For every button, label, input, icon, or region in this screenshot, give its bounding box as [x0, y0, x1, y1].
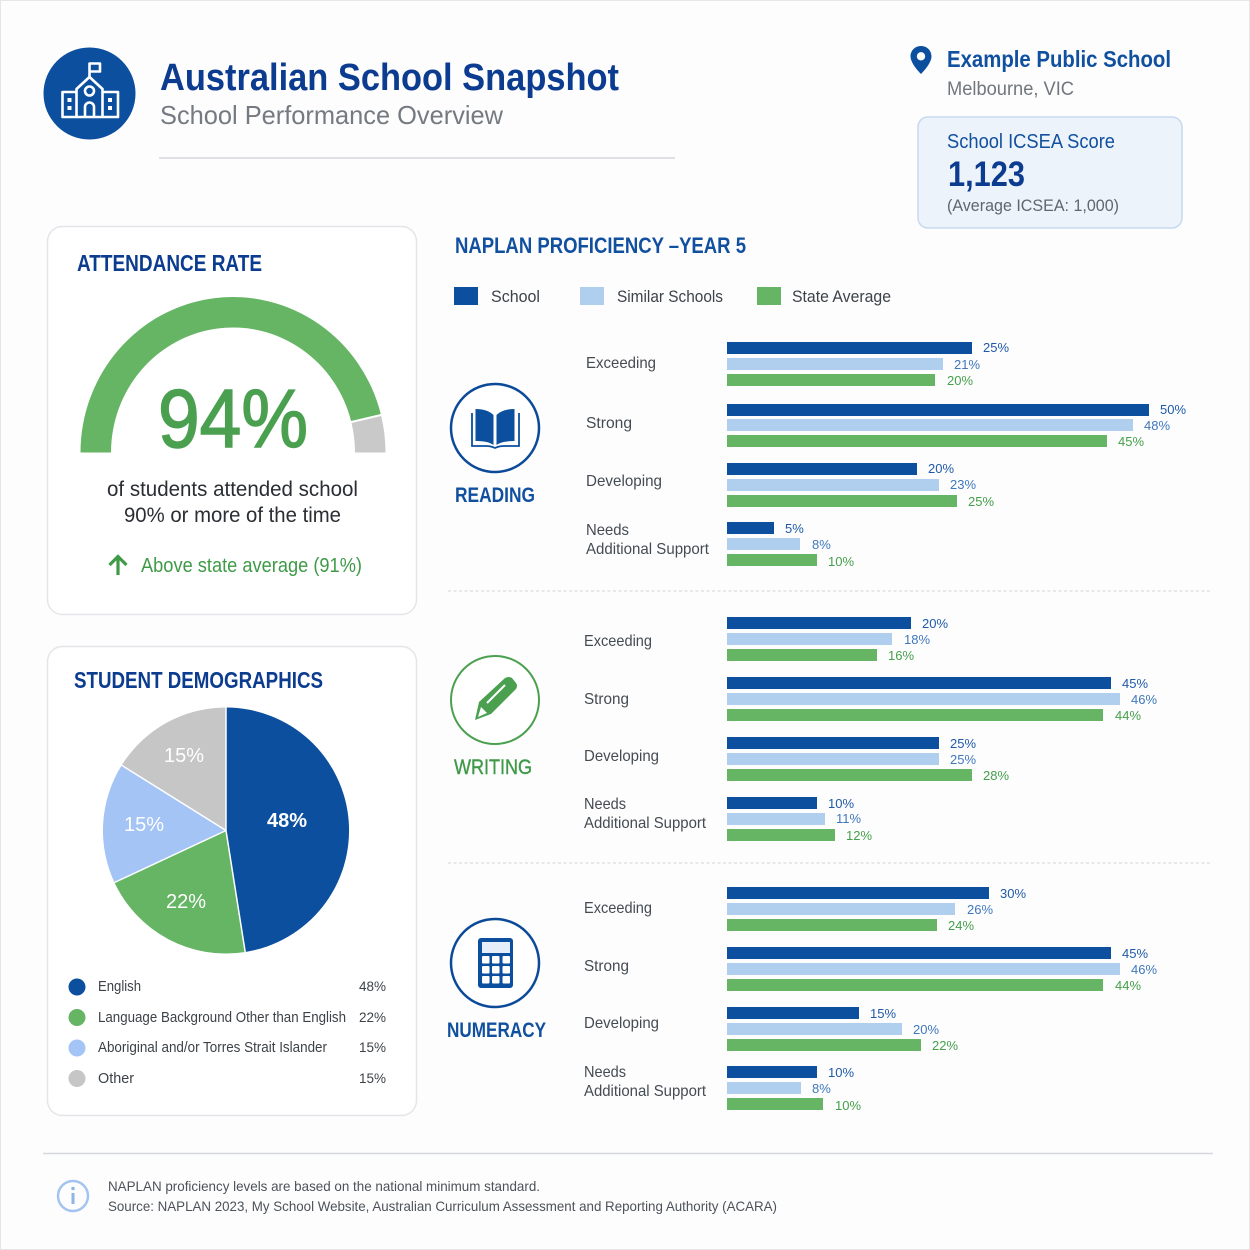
pie chart — [103, 707, 349, 954]
legend: naplan: Similar Schools — [617, 287, 723, 306]
footnote: NAPLAN proficiency levels are based on the national minimum standard. — [108, 1178, 540, 1194]
bar chart: numeracy: 46% — [1131, 962, 1157, 977]
row labels: reading: Additional Support — [586, 541, 710, 558]
bar chart: writing: 25% — [950, 752, 976, 767]
panel: ICSEA score — [918, 117, 1182, 228]
bar chart: reading: 25% — [968, 494, 994, 509]
row labels: reading: Exceeding — [586, 355, 656, 372]
row labels: reading — [586, 355, 710, 558]
school name: Example Public School — [947, 46, 1171, 72]
attendance description: 90% or more of the time — [124, 504, 341, 527]
bar chart: reading: 20% — [947, 373, 973, 388]
bar chart: reading: 45% — [1118, 434, 1144, 449]
icon: location pin — [910, 46, 932, 74]
row labels: numeracy: Developing — [584, 1015, 659, 1032]
bar chart: writing: 46% — [1131, 692, 1157, 707]
row labels: writing: Strong — [584, 691, 629, 708]
bar chart: reading: 48% — [1144, 418, 1170, 433]
bar chart: writing: 45% — [1122, 676, 1148, 691]
bar chart: reading: 25% — [983, 340, 1009, 355]
row labels: writing: Additional Support — [584, 815, 707, 832]
pie chart: 15% — [164, 745, 204, 767]
bar chart: numeracy: 45% — [1122, 946, 1148, 961]
bar chart: writing: 11% — [836, 811, 861, 826]
row labels: writing: Exceeding — [584, 633, 652, 650]
bar chart: writing: 28% — [983, 768, 1009, 783]
row labels: writing: Developing — [584, 748, 659, 765]
row labels: numeracy: Strong — [584, 958, 629, 975]
bar chart: reading: 10% — [828, 554, 854, 569]
legend: demographics: 15% — [359, 1071, 386, 1086]
attendance value: 94% — [158, 372, 308, 465]
ICSEA value: 1,123 — [948, 155, 1025, 194]
bar chart: reading: 5% — [785, 521, 804, 536]
bar chart: numeracy: 10% — [828, 1065, 854, 1080]
row labels: writing — [584, 633, 707, 832]
bar chart: numeracy — [727, 886, 1157, 1113]
icon: calculator — [451, 919, 539, 1007]
ICSEA average: (Average ICSEA: 1,000) — [947, 196, 1119, 215]
bar chart: numeracy: 44% — [1115, 978, 1141, 993]
legend: demographics: Aboriginal and/or Torres Strait Islander — [98, 1040, 327, 1056]
bar chart: reading: 23% — [950, 477, 976, 492]
bar chart: reading — [727, 340, 1186, 569]
icon: book — [451, 384, 539, 472]
legend: demographics: 22% — [359, 1010, 386, 1025]
school location: Melbourne, VIC — [947, 79, 1074, 100]
subtitle: School Performance Overview — [160, 100, 503, 130]
row labels: writing: Needs — [584, 796, 626, 813]
writing label: WRITING — [454, 756, 532, 779]
attendance heading: ATTENDANCE RATE — [77, 250, 262, 276]
row labels: numeracy: Additional Support — [584, 1083, 707, 1100]
row labels: reading: Strong — [586, 415, 632, 432]
legend: demographics: 15% — [359, 1040, 386, 1055]
bar chart: writing: 18% — [904, 632, 930, 647]
row labels: numeracy: Exceeding — [584, 900, 652, 917]
demographics heading: STUDENT DEMOGRAPHICS — [74, 667, 323, 693]
footnote — [108, 1178, 777, 1214]
legend: demographics: English — [98, 979, 141, 995]
panel: attendance rate — [48, 226, 416, 614]
legend: demographics: Language Background Other than English — [98, 1010, 346, 1026]
attendance description — [107, 478, 358, 527]
legend: naplan — [454, 287, 891, 306]
gauge chart — [80, 297, 386, 452]
panel: reading — [451, 340, 1186, 569]
panel: numeracy — [447, 886, 1157, 1113]
pie chart: 22% — [166, 891, 206, 913]
bar chart: writing: 12% — [846, 828, 872, 843]
numeracy label: NUMERACY — [447, 1019, 546, 1042]
icon: pencil — [451, 656, 539, 744]
panel: writing — [451, 616, 1157, 843]
row labels: numeracy: Needs — [584, 1064, 626, 1081]
bar chart: numeracy: 30% — [1000, 886, 1026, 901]
legend: demographics: Other — [98, 1071, 134, 1087]
icon: up arrow — [110, 556, 126, 575]
state comparison: Above state average (91%) — [141, 555, 362, 577]
row labels: numeracy — [584, 900, 707, 1100]
bar chart: numeracy: 22% — [932, 1038, 958, 1053]
bar chart: numeracy: 15% — [870, 1006, 896, 1021]
bar chart: writing: 10% — [828, 796, 854, 811]
row labels: reading: Needs — [586, 522, 629, 539]
bar chart: reading: 21% — [954, 357, 980, 372]
bar chart: numeracy: 20% — [913, 1022, 939, 1037]
bar chart: numeracy: 24% — [948, 918, 974, 933]
bar chart: numeracy: 8% — [812, 1081, 831, 1096]
legend: demographics: 48% — [359, 979, 386, 994]
reading label: READING — [455, 484, 535, 507]
pie chart: 15% — [124, 814, 164, 836]
bar chart: reading: 8% — [812, 537, 831, 552]
bar chart: writing — [727, 616, 1157, 843]
footnote: Source: NAPLAN 2023, My School Website, Australian Curriculum Assessment and Reporting Authority (ACARA) — [108, 1198, 777, 1214]
bar chart: writing: 25% — [950, 736, 976, 751]
bar chart: writing: 20% — [922, 616, 948, 631]
bar chart: writing: 44% — [1115, 708, 1141, 723]
naplan heading: NAPLAN PROFICIENCY –YEAR 5 — [455, 233, 746, 258]
bar chart: reading: 20% — [928, 461, 954, 476]
icon: info — [58, 1181, 88, 1211]
bar chart: writing: 16% — [888, 648, 914, 663]
title: Australian School Snapshot — [160, 57, 619, 99]
legend: naplan: School — [491, 287, 540, 306]
bar chart: numeracy: 10% — [835, 1098, 861, 1113]
ICSEA label: School ICSEA Score — [947, 131, 1115, 153]
pie chart: 48% — [267, 810, 307, 832]
bar chart: numeracy: 26% — [967, 902, 993, 917]
row labels: reading: Developing — [586, 473, 662, 490]
icon: school — [44, 48, 136, 140]
attendance description: of students attended school — [107, 478, 358, 501]
legend: naplan: State Average — [792, 287, 891, 306]
legend: demographics — [68, 978, 386, 1087]
panel: student demographics — [48, 646, 416, 1116]
bar chart: reading: 50% — [1160, 402, 1186, 417]
